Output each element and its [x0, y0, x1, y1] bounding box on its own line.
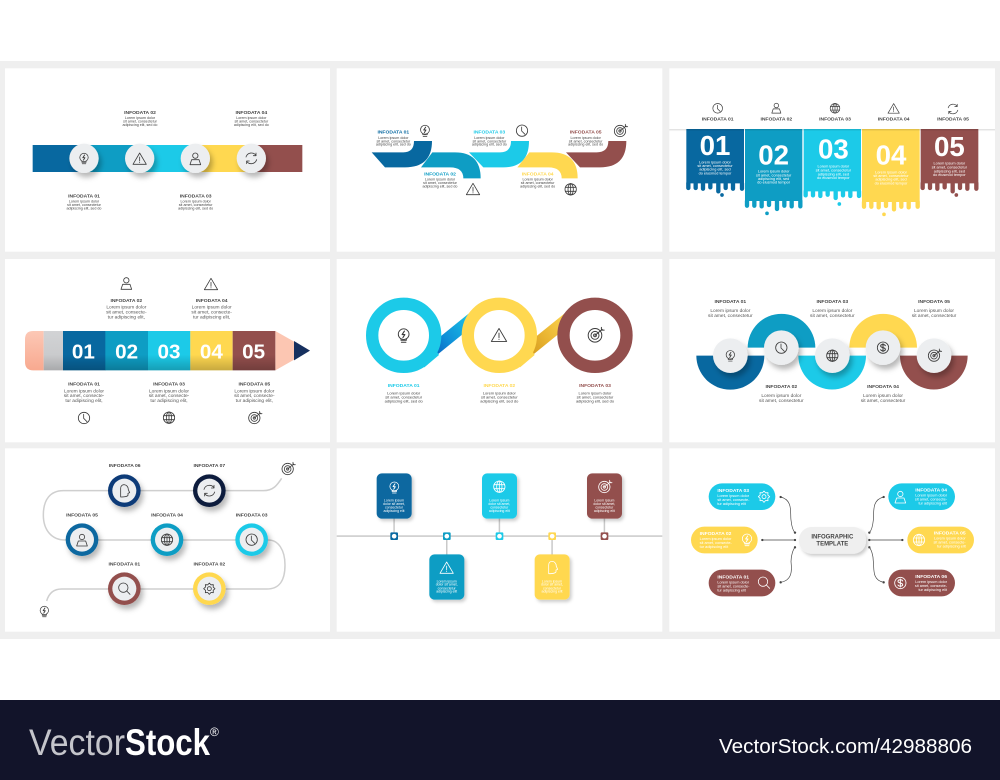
- step 05: [66, 512, 98, 556]
- step 04: INFODATA 04: [151, 512, 183, 518]
- label INFODATA 02: Lorem ipsum dolor: [125, 116, 156, 120]
- label INFODATA 01: [376, 130, 411, 147]
- label INFODATA 05: Lorem ipsum dolor: [914, 308, 954, 314]
- label INFODATA 01: Lorem ipsum dolor: [69, 200, 100, 204]
- label INFODATA 01: [385, 383, 423, 404]
- pill INFODATA 01: [709, 570, 775, 596]
- footer bar: [0, 700, 1000, 780]
- card 5 brown with node: adipiscing elit: [594, 509, 615, 513]
- label INFODATA 02 with person icon: [106, 278, 147, 320]
- label INFODATA 02: INFODATA 02: [124, 110, 156, 116]
- label INFODATA 01 with clock icon: INFODATA 01: [68, 382, 100, 388]
- panel: pencil timeline: [5, 259, 330, 442]
- label INFODATA 03: adipiscing elit, sed do: [472, 143, 507, 147]
- column 03: [804, 129, 861, 206]
- column 05: Lorem ipsum dolor: [933, 161, 966, 165]
- pencil: 02: [115, 340, 138, 363]
- ribbon 2: [421, 152, 481, 178]
- label INFODATA 01: Lorem ipsum dolor: [378, 136, 409, 140]
- half circle blue: [696, 356, 764, 390]
- column 04: [862, 129, 920, 216]
- label INFODATA 01: sit amet, consectetur: [385, 395, 423, 400]
- pill INFODATA 06: INFODATA 06: [915, 574, 947, 580]
- label INFODATA 04: adipiscing elit, sed do: [234, 123, 269, 127]
- icon: clock: [516, 125, 528, 136]
- card 2 teal with node: [429, 532, 464, 600]
- column 01: do eiusmod tempor: [699, 171, 732, 175]
- circle with dollar icon: [866, 330, 900, 365]
- label INFODATA 02 with person icon: sit amet, consecte-: [106, 309, 147, 315]
- label INFODATA 02: INFODATA 02: [483, 383, 515, 389]
- column 03: Lorem ipsum dolor: [817, 165, 850, 169]
- label INFODATA 02: [759, 384, 804, 404]
- label INFODATA 01: adipiscing elit, sed do: [67, 207, 101, 211]
- label INFODATA 01: sit amet, consectetur: [67, 203, 102, 207]
- label INFODATA 04: INFODATA 04: [867, 384, 899, 390]
- card 5 brown with node: [587, 473, 622, 540]
- label INFODATA 03: INFODATA 03: [473, 130, 505, 136]
- label INFODATA 04: INFODATA 04: [235, 110, 267, 116]
- label INFODATA 02: [123, 110, 158, 127]
- label INFODATA 01: adipiscing elit, sed do: [385, 399, 423, 404]
- panel: timeline with cards: [337, 448, 662, 632]
- half circle brown: [900, 356, 968, 389]
- step 02: [193, 561, 226, 605]
- label INFODATA 03 with globe icon: tur adipiscing elit,: [150, 398, 188, 404]
- pill INFODATA 02: [691, 527, 758, 553]
- step 03: [235, 512, 268, 556]
- label INFODATA 04: INFODATA 04: [522, 172, 554, 178]
- label INFODATA 02: [480, 383, 519, 404]
- label INFODATA 02 with person icon: tur adipiscing elit,: [108, 314, 145, 320]
- step circle 1 with bulb icon: [69, 144, 99, 173]
- card 2 teal with node: Lorem ipsum: [437, 579, 457, 583]
- label INFODATA 05: adipiscing elit, sed do: [568, 143, 603, 147]
- circle with globe icon: [815, 338, 850, 373]
- label INFODATA 04 with warning icon: tur adipiscing elit,: [193, 314, 230, 320]
- column 01: sit amet, consectetur: [697, 164, 733, 168]
- panel: linked rings: [337, 259, 662, 442]
- circle with target icon: [917, 338, 951, 373]
- pill INFODATA 05: [907, 527, 974, 553]
- card 5 brown with node: consectetur: [595, 506, 614, 510]
- card 2 teal with node: consectetur: [438, 586, 457, 590]
- label INFODATA 03: INFODATA 03: [816, 299, 848, 305]
- image id: VectorStock.com/42988806: [719, 736, 972, 758]
- ribbon 4: [517, 152, 578, 178]
- label INFODATA 01: sit amet, consectetur: [376, 139, 411, 143]
- label INFODATA 04: Lorem ipsum dolor: [863, 393, 903, 399]
- label INFODATA 02: INFODATA 02: [765, 384, 797, 390]
- label INFODATA 03 with globe icon: sit amet, consecte-: [149, 393, 190, 399]
- label INFODATA 03: Lorem ipsum dolor: [812, 308, 853, 314]
- pill INFODATA 03: sit amet, consecte-: [717, 498, 750, 502]
- header 05 with refresh icon: INFODATA 05: [937, 117, 969, 123]
- connector arrows: [761, 496, 903, 583]
- ribbon 5: [566, 141, 626, 167]
- pill INFODATA 06: sit amet, consecte-: [915, 584, 948, 588]
- label INFODATA 05: [568, 130, 603, 147]
- central pill: TEMPLATE: [816, 542, 848, 548]
- label INFODATA 04 with warning icon: Lorem ipsum dolor: [192, 305, 232, 311]
- column 01: [686, 129, 744, 197]
- label INFODATA 01: sit amet, consectetur: [708, 313, 753, 319]
- pill INFODATA 02: tur adipiscing elit: [700, 545, 729, 549]
- VectorStock logo: Vector: [29, 722, 125, 763]
- header 03 with globe icon: [819, 104, 851, 123]
- panel: mind map with central template: [669, 448, 995, 632]
- card 5 brown with node: Lorem ipsum: [594, 499, 614, 503]
- label INFODATA 02 with person icon: Lorem ipsum dolor: [106, 305, 147, 311]
- label INFODATA 01: adipiscing elit, sed do: [376, 143, 411, 147]
- circle with clock icon: [764, 330, 799, 365]
- pill INFODATA 02: Lorem ipsum dolor: [700, 537, 732, 541]
- label INFODATA 03: INFODATA 03: [579, 383, 611, 389]
- label INFODATA 03: Lorem ipsum dolor: [474, 136, 505, 140]
- card 1 blue with node: Lorem ipsum: [384, 499, 404, 503]
- column 02: sit amet, consectetur: [756, 173, 792, 177]
- label INFODATA 02: sit amet, consectetur: [423, 181, 458, 185]
- label INFODATA 05 with target icon: Lorem ipsum dolor: [234, 388, 275, 394]
- step 06: [108, 463, 141, 507]
- icon: bulb start: [40, 606, 49, 617]
- ring 3 with target icon: [563, 304, 626, 367]
- card 1 blue with node: [377, 473, 412, 540]
- card 4 yellow with node: adipiscing elit: [542, 590, 562, 594]
- column 05: sit amet, consectetur: [932, 165, 968, 169]
- connecting ribbon cyan to yellow: [418, 311, 472, 367]
- pill INFODATA 04: tur adipiscing elit: [918, 502, 948, 506]
- step 04: [151, 512, 183, 556]
- pencil: [25, 331, 310, 370]
- pill INFODATA 05: INFODATA 05: [934, 531, 966, 537]
- column 02: adipiscing elit, sed: [758, 177, 789, 181]
- icon: target: [614, 124, 628, 137]
- label INFODATA 04 with warning icon: INFODATA 04: [196, 298, 228, 304]
- step 02: INFODATA 02: [193, 561, 225, 567]
- label INFODATA 02: sit amet, consectetur: [123, 119, 158, 123]
- label INFODATA 03: [472, 130, 507, 147]
- label INFODATA 02: sit amet, consectetur: [759, 398, 804, 404]
- label INFODATA 03: sit amet, consectetur: [472, 139, 507, 143]
- label INFODATA 02: [423, 172, 458, 189]
- step circle 3 with person icon: [181, 144, 210, 173]
- step 07: INFODATA 07: [193, 463, 225, 469]
- card 5 brown with node: dolor sit amet,: [593, 502, 615, 506]
- timeline axis: [337, 535, 662, 537]
- pill INFODATA 04: [888, 483, 955, 510]
- label INFODATA 03: [810, 299, 855, 319]
- header 03 with globe icon: INFODATA 03: [819, 117, 851, 123]
- panel: winding road with seven steps: [5, 448, 330, 632]
- label INFODATA 03: Lorem ipsum dolor: [578, 391, 612, 396]
- label INFODATA 02: Lorem ipsum dolor: [425, 178, 456, 182]
- column 04: 04: [876, 139, 907, 170]
- pill INFODATA 02: INFODATA 02: [700, 531, 732, 537]
- ring 1 with bulb icon: [372, 304, 435, 367]
- icon: target end: [282, 462, 295, 475]
- card 3 cyan with node: Lorem ipsum: [489, 499, 509, 503]
- card 1 blue with node: consectetur: [385, 506, 404, 510]
- label INFODATA 05 with target icon: [234, 382, 275, 424]
- label INFODATA 04: adipiscing elit, sed do: [520, 185, 555, 189]
- header 02 with person icon: INFODATA 02: [760, 117, 792, 123]
- label INFODATA 04: [520, 172, 555, 189]
- card 3 cyan with node: dolor sit amet,: [488, 502, 510, 506]
- column 03: 03: [818, 134, 849, 165]
- pill INFODATA 04: Lorem ipsum dolor: [915, 494, 948, 498]
- pill INFODATA 06: [888, 570, 955, 596]
- pencil: 03: [158, 340, 180, 363]
- label INFODATA 04: [234, 110, 269, 127]
- card 4 yellow with node: [535, 532, 570, 600]
- header 04 with warning icon: [878, 104, 910, 123]
- label INFODATA 02: adipiscing elit, sed do: [480, 399, 519, 404]
- card 3 cyan with node: adipiscing elit: [489, 509, 510, 513]
- column 04: adipiscing elit, sed: [875, 178, 907, 182]
- label INFODATA 01: Lorem ipsum dolor: [387, 391, 421, 396]
- pill INFODATA 04: INFODATA 04: [915, 488, 947, 494]
- label INFODATA 04 with warning icon: [191, 278, 232, 320]
- pill INFODATA 03: [709, 483, 775, 510]
- card 1 blue with node: adipiscing elit: [384, 509, 404, 513]
- pencil: 01: [72, 340, 95, 363]
- label INFODATA 02: Lorem ipsum dolor: [483, 391, 517, 396]
- step 03: INFODATA 03: [236, 512, 268, 518]
- pill INFODATA 04: sit amet, consecte-: [915, 498, 948, 502]
- central pill: INFOGRAPHIC: [811, 534, 854, 540]
- pill INFODATA 03: tur adipiscing elit: [717, 502, 747, 506]
- header 05 with refresh icon: [937, 104, 969, 123]
- connecting ribbon yellow to brown: [514, 311, 568, 367]
- icon: globe: [565, 184, 576, 195]
- label INFODATA 05 with target icon: INFODATA 05: [238, 382, 270, 388]
- half circle cyan: [798, 356, 866, 389]
- pill INFODATA 06: Lorem ipsum dolor: [915, 580, 948, 584]
- label INFODATA 01: [708, 299, 753, 319]
- pencil: 04: [200, 340, 223, 363]
- column 04: Lorem ipsum dolor: [875, 170, 908, 174]
- card 2 teal with node: dolor sit amet,: [436, 583, 458, 587]
- half circle teal: [748, 314, 815, 348]
- panel: curved ribbons: [337, 68, 662, 252]
- label INFODATA 03: adipiscing elit, sed do: [178, 207, 213, 211]
- label INFODATA 05: sit amet, consectetur: [569, 139, 603, 143]
- column 02: 02: [758, 139, 789, 170]
- colour bar: [33, 145, 302, 172]
- label INFODATA 05 with target icon: sit amet, consecte-: [234, 393, 275, 399]
- label INFODATA 05: INFODATA 05: [570, 130, 602, 136]
- label INFODATA 05 with target icon: tur adipiscing elit,: [236, 398, 273, 404]
- label INFODATA 02: adipiscing elit, sed do: [123, 123, 157, 127]
- circle with bulb icon: [713, 338, 748, 373]
- column 03: sit amet, consectetur: [816, 169, 852, 173]
- column 05: 05: [934, 131, 965, 162]
- label INFODATA 04 with warning icon: sit amet, consecte-: [191, 309, 232, 315]
- label INFODATA 01: INFODATA 01: [388, 383, 420, 389]
- column 05: adipiscing elit, sed: [934, 169, 965, 173]
- label INFODATA 01 with clock icon: [64, 382, 105, 424]
- ribbon 3: [469, 141, 529, 167]
- label INFODATA 05: [912, 299, 957, 319]
- card 1 blue with node: dolor sit amet,: [383, 502, 405, 506]
- pill INFODATA 06: tur adipiscing elit: [918, 588, 948, 592]
- label INFODATA 01: INFODATA 01: [377, 130, 409, 136]
- label INFODATA 02 with person icon: INFODATA 02: [110, 298, 142, 304]
- pill INFODATA 03: INFODATA 03: [717, 488, 749, 494]
- pill INFODATA 01: tur adipiscing elit: [717, 588, 747, 592]
- step 06: INFODATA 06: [109, 463, 141, 469]
- header 02 with person icon: [760, 103, 792, 123]
- road line: [43, 478, 285, 601]
- pill INFODATA 05: tur adipiscing elit: [937, 545, 967, 549]
- label INFODATA 01: Lorem ipsum dolor: [710, 308, 751, 314]
- column 03: adipiscing elit, sed: [818, 172, 849, 176]
- label INFODATA 04: sit amet, consectetur: [861, 398, 906, 404]
- icon: warning: [466, 183, 480, 195]
- pill INFODATA 05: sit amet, consecte-: [934, 541, 966, 545]
- pill INFODATA 03: Lorem ipsum dolor: [717, 494, 750, 498]
- label INFODATA 03: INFODATA 03: [180, 193, 212, 199]
- column 02: [745, 129, 802, 215]
- header 01 with clock icon: [702, 104, 734, 123]
- label INFODATA 04: Lorem ipsum dolor: [523, 178, 554, 182]
- label INFODATA 02: adipiscing elit, sed do: [423, 185, 457, 189]
- label INFODATA 01 with clock icon: Lorem ipsum dolor: [64, 388, 104, 394]
- label INFODATA 03 with globe icon: [149, 382, 190, 423]
- column 01: adipiscing elit, sed: [699, 168, 731, 172]
- label INFODATA 01: [67, 193, 102, 211]
- step 01: INFODATA 01: [108, 561, 140, 567]
- card 4 yellow with node: consectetur: [543, 586, 562, 590]
- label INFODATA 03: sit amet, consectetur: [179, 203, 213, 207]
- column 05: [921, 129, 978, 197]
- label INFODATA 03: adipiscing elit, sed do: [576, 399, 615, 404]
- column 02: Lorem ipsum dolor: [758, 170, 790, 174]
- column 02: do eiusmod tempor: [757, 181, 791, 185]
- label INFODATA 03: [576, 383, 615, 404]
- column 04: do eiusmod tempor: [875, 181, 908, 185]
- card 4 yellow with node: Lorem ipsum: [542, 579, 562, 583]
- VectorStock logo: Stock: [125, 722, 210, 763]
- label INFODATA 02: Lorem ipsum dolor: [761, 393, 802, 399]
- pencil: 05: [242, 340, 265, 363]
- step circle 2 with warning icon: [125, 144, 154, 173]
- step 05: INFODATA 05: [66, 512, 98, 518]
- panel: horizontal bar with four circles: [5, 68, 330, 252]
- page background band: [0, 61, 1000, 639]
- VectorStock logo: ®: [210, 725, 219, 739]
- label INFODATA 03: sit amet, consectetur: [810, 313, 855, 319]
- label INFODATA 04: Lorem ipsum dolor: [236, 116, 267, 120]
- half circle yellow: [849, 314, 917, 348]
- label INFODATA 03 with globe icon: INFODATA 03: [153, 382, 185, 388]
- card 3 cyan with node: consectetur: [490, 506, 509, 510]
- label INFODATA 05: Lorem ipsum dolor: [571, 136, 602, 140]
- pill INFODATA 05: Lorem ipsum dolor: [934, 537, 966, 541]
- label INFODATA 05: sit amet, consectetur: [912, 313, 957, 319]
- card 4 yellow with node: dolor sit amet,: [541, 583, 563, 587]
- label INFODATA 01: INFODATA 01: [68, 193, 100, 199]
- ring 2 with warning icon: [468, 304, 531, 367]
- column 03: do eiusmod tempor: [817, 176, 850, 180]
- VectorStock logo: [29, 722, 219, 763]
- label INFODATA 01 with clock icon: tur adipiscing elit,: [65, 398, 103, 404]
- pill INFODATA 02: sit amet, consecte-: [700, 541, 733, 545]
- column 01: 01: [700, 130, 730, 161]
- label INFODATA 03 with globe icon: Lorem ipsum dolor: [149, 388, 189, 394]
- label INFODATA 04: sit amet, consectetur: [234, 119, 269, 123]
- label INFODATA 04: sit amet, consectetur: [521, 181, 555, 185]
- column 01: Lorem ipsum dolor: [699, 160, 732, 164]
- card 3 cyan with node: [482, 473, 517, 540]
- label INFODATA 01 with clock icon: sit amet, consecte-: [64, 393, 105, 399]
- step circle 4 with refresh icon: [237, 144, 266, 173]
- icon: bulb: [421, 125, 429, 136]
- column 05: do eiusmod tempor: [933, 173, 966, 177]
- step 01: [108, 561, 141, 605]
- label INFODATA 03: Lorem ipsum dolor: [181, 200, 212, 204]
- panel: dripping paint columns: [669, 68, 995, 252]
- label INFODATA 03: sit amet, consectetur: [577, 395, 614, 400]
- column 04: sit amet, consectetur: [873, 174, 909, 178]
- pill INFODATA 01: Lorem ipsum dolor: [717, 580, 750, 584]
- header 01 with clock icon: INFODATA 01: [702, 117, 734, 123]
- label INFODATA 03: [178, 193, 213, 211]
- header 04 with warning icon: INFODATA 04: [878, 117, 910, 123]
- label INFODATA 05: INFODATA 05: [918, 299, 950, 305]
- panel: wave of half circles: [669, 259, 995, 442]
- central pill: [799, 527, 866, 554]
- ribbon 1: [372, 141, 432, 167]
- label INFODATA 01: INFODATA 01: [714, 299, 746, 305]
- pill INFODATA 01: sit amet, consecte-: [717, 584, 750, 588]
- pill INFODATA 01: INFODATA 01: [717, 574, 749, 580]
- step 07: [193, 463, 226, 507]
- card 2 teal with node: adipiscing elit: [436, 590, 457, 594]
- label INFODATA 02: sit amet, consectetur: [481, 395, 518, 400]
- label INFODATA 02: INFODATA 02: [424, 172, 456, 178]
- label INFODATA 04: [861, 384, 906, 404]
